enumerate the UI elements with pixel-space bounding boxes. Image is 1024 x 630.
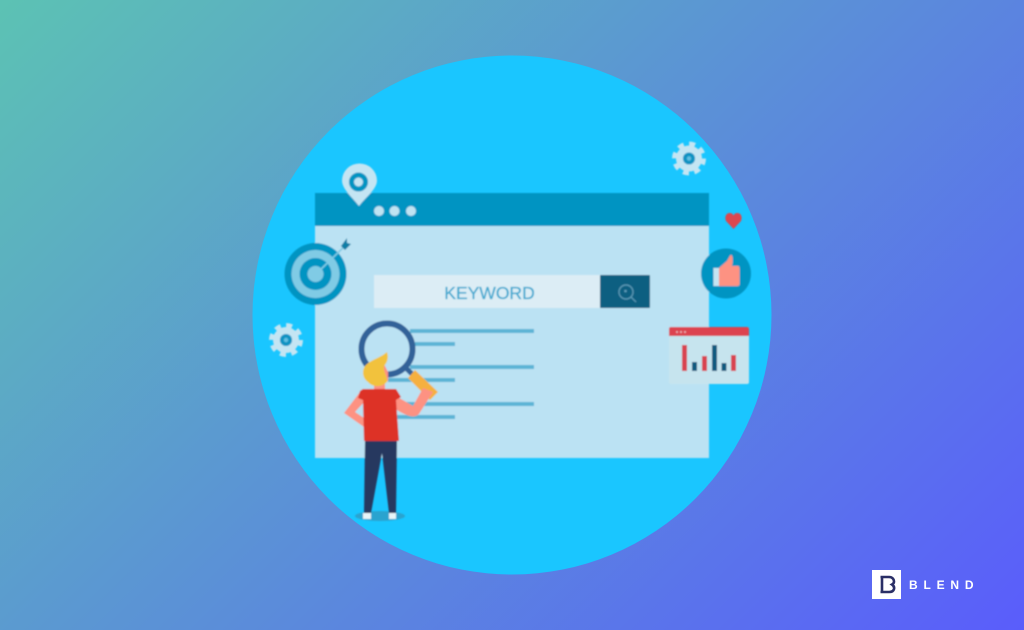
blue circle backdrop [252, 56, 772, 574]
keyword label: KEYWORD [444, 283, 535, 303]
icon: heart [725, 213, 742, 229]
logo wordmark: BLEND [909, 578, 979, 592]
chart card [669, 327, 749, 384]
shirt [358, 389, 401, 441]
icon: thumbs up [701, 248, 751, 298]
icon: search [619, 285, 636, 302]
logo mark [872, 570, 901, 599]
icon: gear right [674, 144, 704, 173]
icon: location pin [342, 164, 377, 206]
face [378, 362, 388, 383]
search bar [374, 275, 650, 308]
person [344, 352, 433, 521]
right arm [394, 388, 433, 416]
browser window [315, 193, 709, 458]
shadow [355, 511, 405, 521]
logo: blend [872, 570, 979, 599]
trousers [364, 440, 397, 513]
icon: target [284, 238, 351, 305]
hair [363, 352, 388, 386]
icon: gear left [272, 326, 300, 354]
illustration [272, 144, 751, 521]
neck [374, 381, 385, 390]
text result lines [388, 329, 534, 419]
bar chart [682, 345, 736, 371]
shoes [363, 513, 371, 519]
left arm [344, 392, 366, 427]
magnifying glass [362, 324, 438, 400]
